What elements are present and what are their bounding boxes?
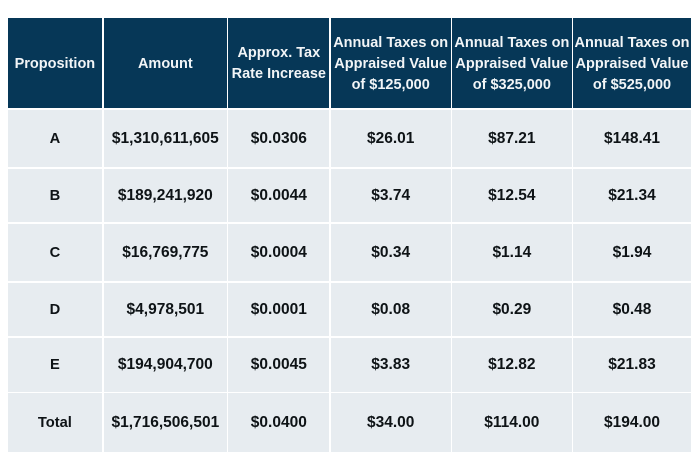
row B bbox=[8, 169, 102, 222]
table: $1,716,506,501 bbox=[111, 414, 219, 431]
header: Annual Taxes on Appraised Value of $525,000: Annual Taxes on bbox=[575, 35, 689, 51]
table: $148.41 bbox=[604, 130, 660, 147]
row C bbox=[8, 224, 102, 281]
row A bbox=[8, 110, 102, 167]
row D: D bbox=[50, 302, 60, 318]
table: $0.29 bbox=[492, 300, 531, 318]
header: Annual Taxes on Appraised Value of $325,000: Annual Taxes on bbox=[454, 35, 569, 51]
table: $0.0001 bbox=[251, 300, 307, 318]
table: $0.48 bbox=[613, 300, 651, 318]
table: $194,904,700 bbox=[118, 356, 213, 373]
table: $3.74 bbox=[371, 187, 410, 204]
row E bbox=[8, 338, 102, 392]
row Total bbox=[8, 393, 102, 452]
table: $26.01 bbox=[367, 130, 414, 147]
row B: B bbox=[50, 188, 60, 204]
table: $1.14 bbox=[492, 244, 531, 260]
header: Approx. Tax Rate Increase bbox=[228, 18, 329, 108]
row Total: Total bbox=[38, 415, 72, 431]
header: Annual Taxes on Appraised Value of $525,000: Appraised Value bbox=[576, 56, 688, 72]
header: Annual Taxes on Appraised Value of $125,000: Appraised Value bbox=[334, 56, 447, 72]
header: Proposition: Proposition bbox=[15, 56, 95, 72]
header: Amount: Amount bbox=[138, 56, 193, 72]
row A: A bbox=[50, 131, 60, 147]
table: $114.00 bbox=[484, 414, 539, 431]
table: $194.00 bbox=[604, 414, 660, 431]
header: Amount bbox=[104, 18, 227, 108]
table: $4,978,501 bbox=[127, 300, 204, 318]
table: $21.83 bbox=[608, 356, 656, 373]
header: Annual Taxes on Appraised Value of $125,000: of $125,000 bbox=[352, 77, 430, 93]
table: $1.94 bbox=[613, 244, 651, 260]
table: $0.0045 bbox=[251, 356, 307, 373]
table: $12.82 bbox=[488, 356, 536, 373]
table: $16,769,775 bbox=[122, 244, 208, 260]
table: $12.54 bbox=[488, 187, 536, 204]
row D bbox=[8, 283, 102, 336]
header: Annual Taxes on Appraised Value of $325,000: Appraised Value bbox=[455, 56, 568, 72]
header: Approx. Tax Rate Increase: Approx. Tax bbox=[237, 45, 320, 61]
table: $0.0400 bbox=[251, 414, 307, 431]
table: $1,310,611,605 bbox=[112, 130, 219, 147]
table: $0.0044 bbox=[251, 187, 307, 204]
table: $34.00 bbox=[367, 414, 414, 431]
table: $87.21 bbox=[488, 130, 536, 147]
header: Annual Taxes on Appraised Value of $325,000 bbox=[452, 18, 572, 108]
header: Annual Taxes on Appraised Value of $325,000: of $325,000 bbox=[473, 77, 551, 93]
row E: E bbox=[50, 357, 60, 373]
header: Annual Taxes on Appraised Value of $525,000: of $525,000 bbox=[593, 77, 671, 93]
table: $0.08 bbox=[371, 300, 410, 318]
header: Annual Taxes on Appraised Value of $125,000 bbox=[331, 18, 451, 108]
table: $3.83 bbox=[371, 356, 410, 373]
table: $0.34 bbox=[371, 244, 410, 260]
table: $189,241,920 bbox=[118, 187, 213, 204]
table: $0.0306 bbox=[251, 130, 307, 147]
header: Proposition bbox=[8, 18, 102, 108]
table: $21.34 bbox=[608, 187, 656, 204]
header: Annual Taxes on Appraised Value of $125,000: Annual Taxes on bbox=[333, 35, 448, 51]
header: Annual Taxes on Appraised Value of $525,000 bbox=[573, 18, 691, 108]
row C: C bbox=[50, 244, 60, 260]
header: Approx. Tax Rate Increase: Rate Increase bbox=[232, 66, 326, 82]
table: $0.0004 bbox=[251, 244, 307, 260]
